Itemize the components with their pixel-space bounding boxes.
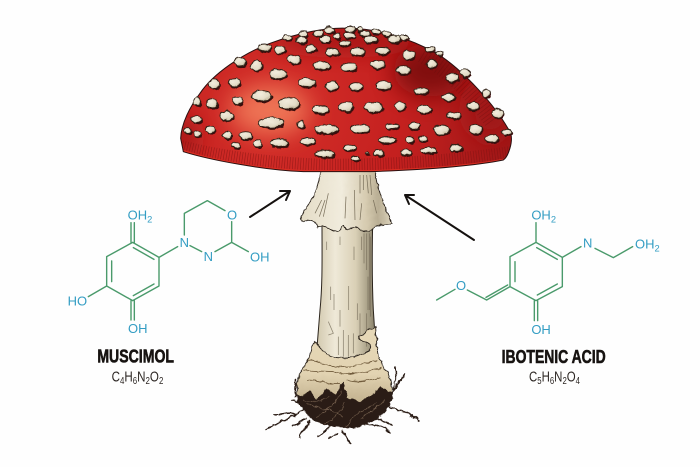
stem: volva ridges bbox=[303, 361, 382, 384]
stem: skirt folds bbox=[315, 175, 377, 220]
ibotenic acid formula: C bbox=[529, 369, 540, 385]
roots and soil bbox=[266, 367, 419, 444]
cap: red dome bbox=[181, 28, 511, 172]
ibotenic acid formula: 2 bbox=[562, 376, 567, 387]
muscimol formula: 4 bbox=[120, 376, 125, 387]
ibotenic acid atom labels: 2 bbox=[654, 243, 660, 253]
muscimol formula: 2 bbox=[159, 376, 164, 387]
cap: white warts bbox=[184, 26, 513, 162]
ibotenic acid atom labels bbox=[456, 207, 660, 337]
muscimol atom labels: OH bbox=[250, 249, 269, 264]
ibotenic acid atom labels: OH bbox=[531, 207, 551, 222]
stem: shaft bbox=[317, 223, 377, 362]
stem: skirt ring bbox=[300, 170, 392, 232]
muscimol formula: H bbox=[124, 369, 133, 385]
muscimol structure bonds bbox=[88, 201, 248, 320]
muscimol atom labels: O bbox=[227, 207, 237, 222]
muscimol atom labels bbox=[68, 207, 269, 336]
ibotenic acid formula: O bbox=[567, 369, 576, 385]
arrow: muscimol to mushroom bbox=[250, 191, 290, 217]
cap: shading and hatching bbox=[170, 27, 513, 171]
ibotenic acid formula: 6 bbox=[550, 376, 555, 387]
ibotenic acid structure bonds bbox=[437, 223, 633, 321]
muscimol atom labels: OH bbox=[128, 207, 147, 222]
ibotenic acid name: IBOTENIC ACID bbox=[502, 346, 606, 367]
muscimol atom labels: N bbox=[180, 235, 189, 250]
illustration: mushroom stem bbox=[266, 170, 419, 444]
muscimol name: MUSCIMOL bbox=[97, 346, 174, 367]
ibotenic acid formula: H bbox=[542, 369, 550, 385]
ibotenic acid atom labels: N bbox=[583, 235, 592, 250]
ibotenic acid formula: 5 bbox=[537, 376, 542, 387]
muscimol formula: 6 bbox=[133, 376, 138, 387]
arrow: ibotenic acid to mushroom bbox=[405, 195, 474, 240]
muscimol formula: 2 bbox=[146, 376, 150, 387]
stem: vertical hatching bbox=[327, 233, 371, 357]
muscimol formula: O bbox=[150, 369, 159, 385]
muscimol atom labels: HO bbox=[68, 293, 87, 308]
muscimol atom labels: 2 bbox=[147, 214, 152, 224]
ibotenic acid atom labels: OH bbox=[635, 236, 654, 251]
muscimol formula: N bbox=[137, 369, 146, 385]
ibotenic acid atom labels: O bbox=[456, 278, 466, 293]
stem: bulb volva bbox=[297, 327, 392, 405]
muscimol formula: C bbox=[112, 369, 122, 385]
ibotenic acid formula: 4 bbox=[576, 376, 580, 387]
muscimol atom labels: OH bbox=[128, 321, 147, 336]
illustration: mushroom cap bbox=[170, 26, 513, 172]
muscimol atom labels: N bbox=[204, 249, 213, 264]
molecule: muscimol bbox=[68, 201, 269, 387]
ibotenic acid formula: N bbox=[554, 369, 562, 385]
ibotenic acid atom labels: OH bbox=[531, 322, 551, 337]
molecule: ibotenic acid bbox=[437, 207, 660, 387]
ibotenic acid atom labels: 2 bbox=[551, 214, 556, 224]
